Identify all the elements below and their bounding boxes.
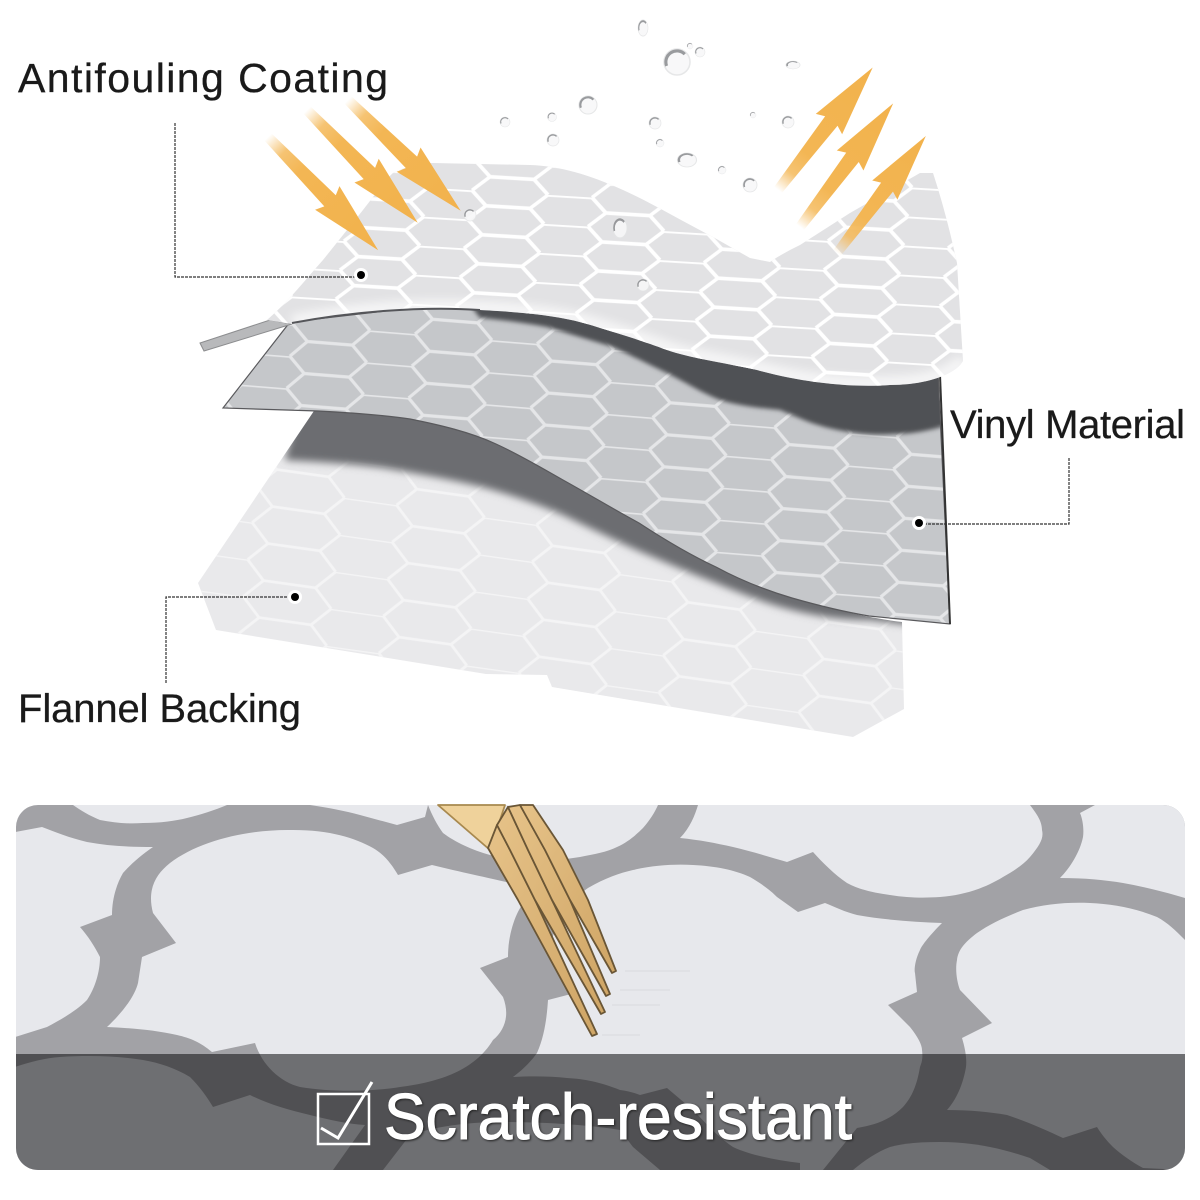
panel: scratch-resistant photo (15, 805, 1185, 1170)
water droplets (464, 20, 800, 291)
layer: antifouling coating (200, 163, 963, 386)
icon: gold fork (438, 805, 616, 1036)
layer: vinyl material (223, 295, 950, 624)
icon: checkbox (318, 1082, 372, 1144)
trellis pattern cells (15, 805, 1185, 1170)
caption: scratch-resistant: Scratch-resistant (384, 1080, 852, 1153)
layer: flannel backing (198, 400, 910, 737)
arrows: incoming stains (256, 88, 473, 262)
label: vinyl material: Vinyl Material (950, 403, 1185, 447)
leader: flannel backing (166, 590, 302, 683)
scratch marks (602, 971, 690, 1035)
leader: vinyl material (912, 458, 1069, 530)
label: flannel backing: Flannel Backing (18, 687, 301, 731)
arrows: repelled outgoing (765, 57, 938, 263)
leader: antifouling coating (175, 123, 368, 282)
layered mat diagram (198, 163, 963, 737)
label: antifouling coating: Antifouling Coating (18, 55, 388, 101)
dark caption strip (16, 1054, 1185, 1170)
